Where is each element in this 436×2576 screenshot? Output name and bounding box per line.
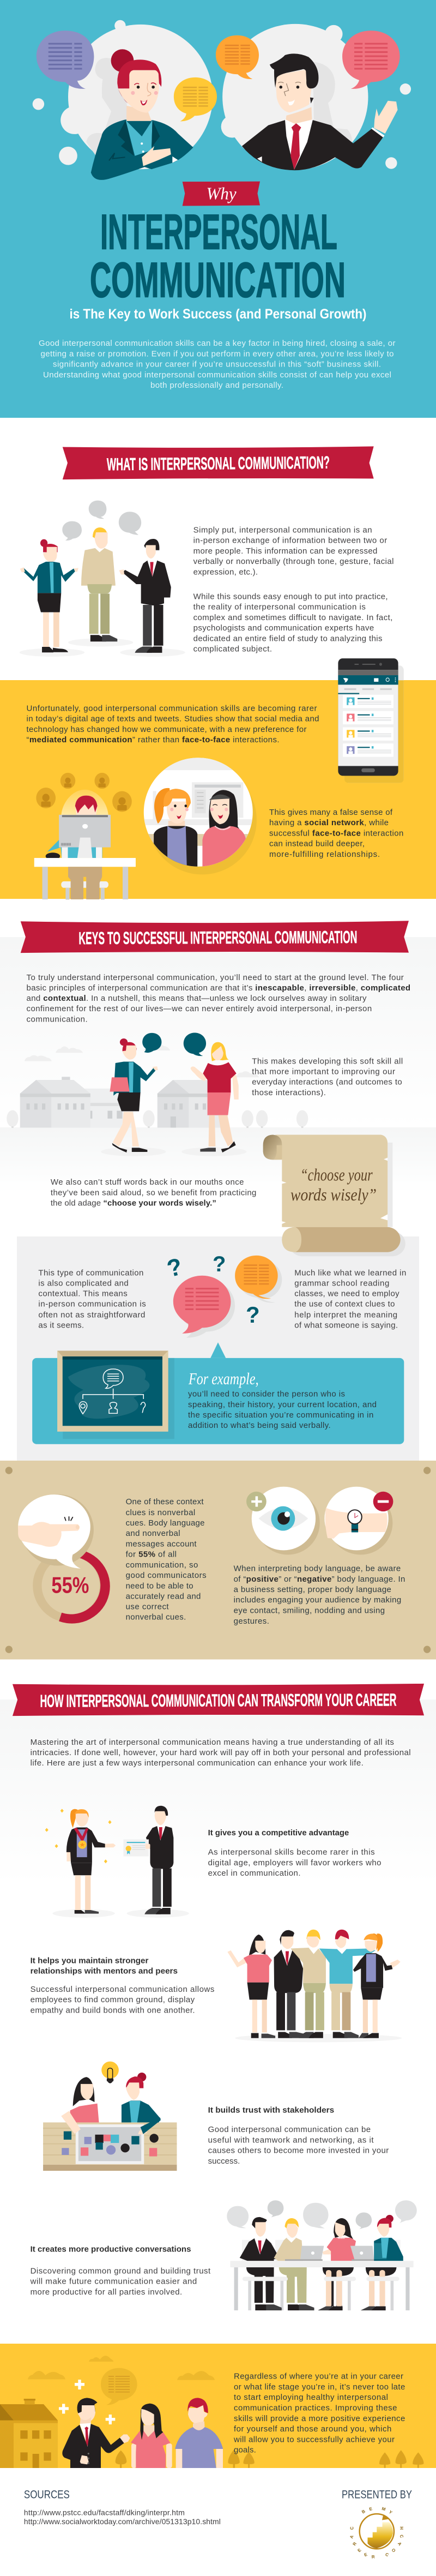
text: soft skill: that more important to improving our [252,1067,395,1077]
text: for example body: addition to what’s being said verbally. [188,1421,331,1430]
icon: wrist watch with minus badge [324,1487,393,1555]
icons: question marks [164,1252,260,1328]
banner: career [13,1684,424,1716]
text: productive conversations: It creates more productive conversations [31,2245,191,2254]
text: stuff words: they’ve been said aloud, so we benefit from practicing [51,1188,256,1197]
text: for example body [188,1390,377,1430]
text: closing statement: communication practices. Improving these [234,2403,397,2412]
panel: ground fade [0,1127,436,1193]
text: nonverbal cues: and nonverbal [126,1529,180,1538]
closing scene: house and three people [0,2356,223,2468]
text: builds trust: useful with teamwork and networking, as it [208,2136,374,2145]
text: context clues: of what someone is saying. [294,1320,398,1330]
section five illustrations [43,1806,402,2171]
logo: be my career coach: M [381,2506,386,2512]
purple speech bubble [37,31,94,89]
award scene: woman with medal and man with certificate [45,1806,189,1918]
text: unfortunately [26,704,319,744]
text: for example body: you’ll need to consider the person who is [188,1390,345,1399]
panel: hero background [0,0,436,418]
subtitle: is The Key to Work Success (and Personal Growth) [70,307,366,322]
text: complicated and contextual: often not as straightforward [38,1310,145,1319]
panel: closing yellow band [0,2344,436,2468]
panel: for example callout [32,1342,404,1444]
text: while this sounds easy: dedicated an entire field of study to analyzing this [193,634,383,644]
text: mastering the art: intricacies. If done well, however, your hard work will pay off in both your personal and professional [31,1748,411,1757]
text: simply put [193,526,393,577]
question cluster and speech bubbles [173,1256,282,1338]
woman character [91,49,193,180]
text: nonverbal cues: communication, so [126,1560,198,1570]
text: competitive advantage [208,1828,382,1878]
chalkboard diagram [57,1351,168,1432]
trees [116,2451,126,2468]
text: stronger relationships: empathy and build bonds with one another. [31,2005,195,2015]
banner: what is [63,446,374,479]
text: nonverbal cues: One of these context [126,1497,204,1506]
intro text [39,339,396,390]
woman shadow [86,58,128,156]
text: body language: includes engaging your audience by making [234,1595,401,1605]
man background circle [221,24,411,170]
text: builds trust: causes others to become more invested in your [208,2146,389,2155]
text: unfortunately: Unfortunately, good interpersonal communication skills are becoming rarer [26,704,317,713]
meeting participants [230,2215,414,2310]
text: four principles: and contextual. In a nutshell, this means that—unless we lock ourselves away in solitary [26,994,367,1003]
why ribbon [183,182,260,206]
icon: light bulb idea [101,2062,119,2083]
text: closing statement: skills will provide a more positive experience [234,2414,405,2423]
text: context clues: help interpret the meaning [294,1310,397,1319]
text: nonverbal cues [126,1497,207,1622]
text: competitive advantage: excel in communication. [208,1869,301,1878]
text: complicated and contextual [38,1268,146,1330]
text: context clues [294,1268,406,1330]
text: complicated and contextual: as it seems. [38,1320,84,1330]
section two illustrations [20,446,404,899]
intro text: Understanding what good interpersonal communication skills consist of can help you excel [43,370,391,380]
logo: be my career coach: O [391,2548,396,2553]
text: complicated and contextual: This type of communication [38,1268,143,1277]
text: soft skill [252,1056,403,1097]
text: source links: http://www.pstcc.edu/facstaff/dking/interpr.htm [24,2508,185,2517]
text: nonverbal cues: messages account [126,1540,197,1549]
logo: be my career coach: Y [388,2509,393,2515]
logo: be my career coach: C [399,2534,404,2538]
text: stronger relationships: relationships with mentors and peers [31,1966,178,1975]
text: while this sounds easy [193,592,392,654]
town backdrop [7,1044,308,1128]
clouds [28,2356,215,2380]
three people talking [20,501,185,657]
pink speech bubble [342,31,400,89]
section four illustrations [5,1342,431,1716]
text: competitive advantage: digital age, employers will favor workers who [208,1858,382,1868]
text: false sense: successful face-to-face interaction [269,828,403,838]
text: body language: of “positive” or “negative” body language. In [234,1575,405,1584]
text: productive conversations: will make future communication easier and [30,2277,197,2286]
banner: keys [21,921,409,953]
text: false sense: more-fulfilling relationships. [269,850,380,859]
text: nonverbal cues: nonverbal cues. [126,1613,186,1622]
text: closing statement: for yourself and those around you, which [234,2424,391,2434]
text: simply put: in-person exchange of information between two or [193,536,387,545]
text: unfortunately: in today’s digital age of texts and tweets. Studies show that social media and [26,714,319,724]
logo: be my career coach: E [356,2548,362,2553]
person in purple [175,2398,223,2468]
logo: be my career coach: R [352,2541,358,2547]
text: builds trust [208,2105,389,2166]
text: builds trust: It builds trust with stakeholders [208,2105,334,2115]
person at computer with contacts [34,773,136,899]
panel: yellow social media band [0,680,436,899]
icons: question marks: ? [164,1253,185,1282]
meeting table illustration [227,2200,417,2310]
text: closing statement: or what life stage you’re in, it’s never too late [234,2382,405,2392]
house [0,2399,58,2468]
intro text: getting a raise or promotion. Even if you out perform in every other area, you’re less likely to [40,349,393,359]
text: four principles: basic principles of interpersonal communication are that it’s inescapable, irreversible, complicated [26,983,410,993]
text: simply put: more people. This information can be expressed [193,547,377,556]
text: mastering the art: life. Here are just a few ways interpersonal communication can enhance your work life. [31,1758,364,1768]
text: builds trust: success. [208,2157,240,2166]
text: nonverbal cues: cues. Body language [126,1518,205,1528]
text: closing statement: Regardless of where you’re at in your career [234,2372,403,2381]
text: soft skill: those interactions). [252,1088,326,1097]
two women face to face circle [144,758,257,874]
text: for example body: speaking, their history, your current location, and [188,1400,377,1409]
text: four principles: communication. [26,1014,88,1024]
man in suit [62,2398,130,2468]
speech bubble [101,2368,137,2405]
text: stuff words: the old adage “choose your words wisely.” [51,1199,216,1208]
logo: be my career coach: A [397,2541,403,2547]
icon: smartphone with twitter feed [338,658,404,783]
two women talking [101,1032,247,1156]
text: body language: eye contact, smiling, nodding and using [234,1606,385,1616]
text: stronger relationships: It helps you maintain stronger [31,1956,149,1966]
screws [5,1467,431,1653]
text: simply put: Simply put, interpersonal communication is an [193,526,372,535]
text: stronger relationships [31,1956,214,2015]
text: mastering the art: Mastering the art of interpersonal communication means having a true understanding of all its [31,1738,394,1747]
text: while this sounds easy: complicated subject. [193,645,272,654]
text: for example heading: For example, [188,1369,259,1388]
text: competitive advantage: It gives you a competitive advantage [208,1828,349,1838]
text: body language: a business setting, proper body language [234,1585,391,1594]
icons: question marks: ? [246,1302,260,1328]
text: mastering the art [31,1738,411,1768]
text: nonverbal cues: accurately read and [126,1592,201,1601]
text: nonverbal cues: use correct [126,1602,169,1611]
intro text: significantly advance in your career if you’re unsuccessful in this “soft” business skill. [53,360,381,369]
logo: be my career coach: C [385,2552,390,2557]
text: stuff words: We also can’t stuff words back in our mouths once [51,1178,244,1187]
woman background circle [33,20,213,169]
man shadow [313,62,352,143]
woman in pink [131,2404,172,2468]
text: source links: http://www.socialworktoday.com/archive/051313p10.shtml [24,2517,221,2526]
text: nonverbal cues: need to be able to [126,1581,193,1590]
text: soft skill: everyday interactions (and outcomes to [252,1078,402,1087]
text: while this sounds easy: While this sounds easy enough to put into practice, [193,592,388,602]
logo: be my career coach: B [361,2509,366,2514]
text: context clues: the use of context clues to [294,1300,395,1309]
text: productive conversations: Discovering common ground and building trust [31,2266,211,2275]
text: competitive advantage: As interpersonal skills become rarer in this [208,1848,375,1857]
section three illustrations [7,921,409,1338]
text: for example body: the specific situation you’re communicating in in [188,1410,373,1420]
text: stronger relationships: Successful interpersonal communication allows [31,1985,214,1994]
scroll quote: words wisely” [290,1185,377,1204]
logo: be my career coach [349,2506,404,2560]
heading: presented by: PRESENTED BY [342,2488,412,2501]
text: while this sounds easy: psychologists and communication experts have [193,623,374,633]
scroll quote [290,1165,377,1204]
text: false sense: This gives many a false sense of [269,808,393,817]
text: body language: gestures. [234,1617,269,1626]
text: context clues: Much like what we learned in [294,1268,406,1277]
plus icons [59,2380,115,2424]
logo: be my career coach: A [349,2535,355,2539]
text: nonverbal cues: good communicators [126,1571,207,1580]
text: stuff words [51,1178,256,1208]
heading: sources: SOURCES [24,2488,70,2501]
orange speech bubble [216,35,259,79]
text: body language [234,1564,405,1626]
text: context clues: classes, we need to employ [294,1289,399,1298]
stat: 55 percent: 55% [51,1572,89,1598]
yellow speech bubble [174,77,217,121]
scroll: choose your words wisely [263,1134,405,1256]
text: false sense: can instead build deeper, [269,839,365,848]
chart: 55 percent donut with pointing hand [18,1494,110,1624]
panel: nonverbal tan board [0,1461,436,1659]
intro text: Good interpersonal communication skills can be a key factor in being hired, closing a sale, or [39,339,396,348]
text: unfortunately: “mediated communication” rather than face-to-face interactions. [26,735,279,744]
text: four principles [26,973,410,1024]
text: false sense: having a social network, while [269,818,389,827]
text: nonverbal cues: clues is nonverbal [126,1508,195,1517]
logo: be my career coach: C [349,2526,354,2530]
logo: be my career coach: R [371,2554,375,2560]
text: while this sounds easy: the reality of interpersonal communication is [193,603,366,612]
text: closing statement: to start employing healthy interpersonal [234,2393,388,2402]
why ribbon: Why [207,184,237,203]
title [90,205,346,308]
text: productive conversations [30,2245,211,2297]
text: complicated and contextual: contextual. This means [38,1289,128,1298]
text: closing statement [233,2372,405,2455]
trees along closing band [228,2449,424,2468]
text: body language: When interpreting body language, be aware [234,1564,401,1574]
logo: be my career coach: E [364,2552,368,2557]
text: false sense [269,808,403,859]
intro text: both professionally and personally. [150,381,283,390]
hero illustration [33,20,411,206]
text: simply put: expression, etc.). [193,568,258,577]
text: soft skill: This makes developing this soft skill all [252,1056,403,1066]
panel: keys section fade background [0,937,436,1128]
text: while this sounds easy: complex and sometimes difficult to navigate. In fact, [193,613,392,622]
text: complicated and contextual: in-person communication is [38,1300,146,1309]
text: builds trust: Good interpersonal communication can be [208,2125,371,2134]
icon: eye with plus badge [246,1487,320,1555]
text: simply put: verbally or nonverbally (through tone, gesture, facial [193,557,393,566]
text: unfortunately: technology has changed how we communicate, with a new preference for [26,725,306,734]
man character [242,53,398,170]
panel: context grey panel [17,1236,419,1461]
two women over a puzzle table [43,2073,177,2171]
text: four principles: confinement for the rest of our lives—we can never entirely avoid interpersonal, in-person [26,1004,372,1013]
text: four principles: To truly understand interpersonal communication, you’ll need to start at the ground level. The four [26,973,404,982]
panel: career section fade background [0,1700,436,1885]
text: stronger relationships: employees to find common ground, display [31,1995,195,2004]
text: source links [24,2508,221,2526]
logo: be my career coach: H [399,2526,404,2530]
icons: question marks: ? [213,1252,226,1276]
text: context clues: grammar school reading [294,1278,389,1288]
group of five colleagues [227,1930,402,2042]
text: complicated and contextual: is also complicated and [38,1278,129,1288]
text: closing statement: will allow you to successfully achieve your [233,2435,395,2445]
scroll quote: “choose your [300,1165,373,1185]
text: nonverbal cues: for 55% of all [126,1550,177,1559]
text: closing statement: goals. [234,2446,256,2455]
text: productive conversations: more productive for all parties involved. [31,2287,182,2297]
logo: be my career coach: E [368,2506,373,2512]
